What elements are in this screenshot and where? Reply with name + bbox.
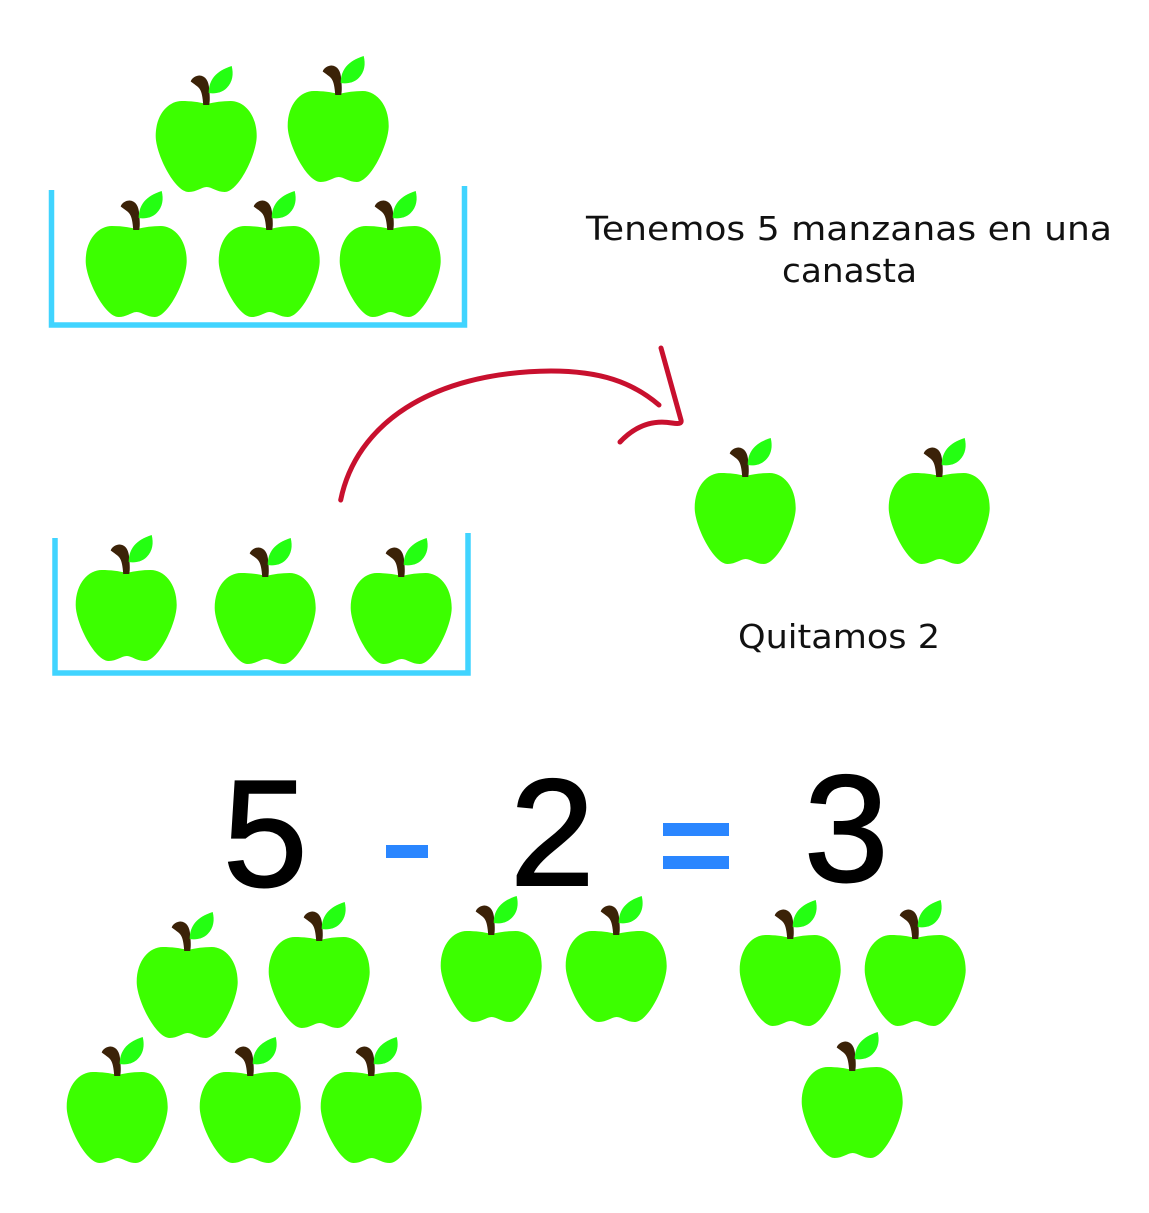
- apple: five group bottom left: [67, 1037, 168, 1163]
- apple: removed left: [695, 438, 796, 564]
- apple: five group bottom right: [321, 1037, 422, 1163]
- minus sign: [386, 845, 428, 858]
- basket one: [52, 186, 464, 325]
- apple: three group bottom: [802, 1032, 903, 1158]
- text: quitamos 2: Quitamos 2: [738, 617, 940, 656]
- apple: basket two right: [351, 538, 452, 664]
- apple: basket one middle: [219, 191, 320, 317]
- basket two: [55, 533, 468, 673]
- apple: basket two middle: [215, 538, 316, 664]
- apple: three group top left: [740, 900, 841, 1026]
- apple: five group top left: [137, 912, 238, 1038]
- apple: top row right: [288, 56, 389, 182]
- apple: removed right: [889, 438, 990, 564]
- apple: basket one right: [340, 191, 441, 317]
- apple: top row left: [156, 66, 257, 192]
- apple: five group top right: [269, 902, 370, 1028]
- text: tenemos 5 manzanas: Tenemos 5 manzanas en una: [585, 209, 1112, 248]
- apple: two group right: [566, 896, 667, 1022]
- number 3: 3: [804, 744, 889, 914]
- apple: two group left: [441, 896, 542, 1022]
- text: tenemos 5 manzanas: [585, 209, 1112, 290]
- arrow: [341, 348, 681, 500]
- apple: basket one left: [86, 191, 187, 317]
- number 5: 5: [223, 749, 308, 919]
- apple: basket two left: [76, 535, 177, 661]
- text: tenemos 5 manzanas: canasta: [782, 251, 917, 290]
- apple: three group top right: [865, 900, 966, 1026]
- number 2: 2: [510, 748, 595, 918]
- apple: five group bottom middle: [200, 1037, 301, 1163]
- equals sign: [663, 823, 729, 869]
